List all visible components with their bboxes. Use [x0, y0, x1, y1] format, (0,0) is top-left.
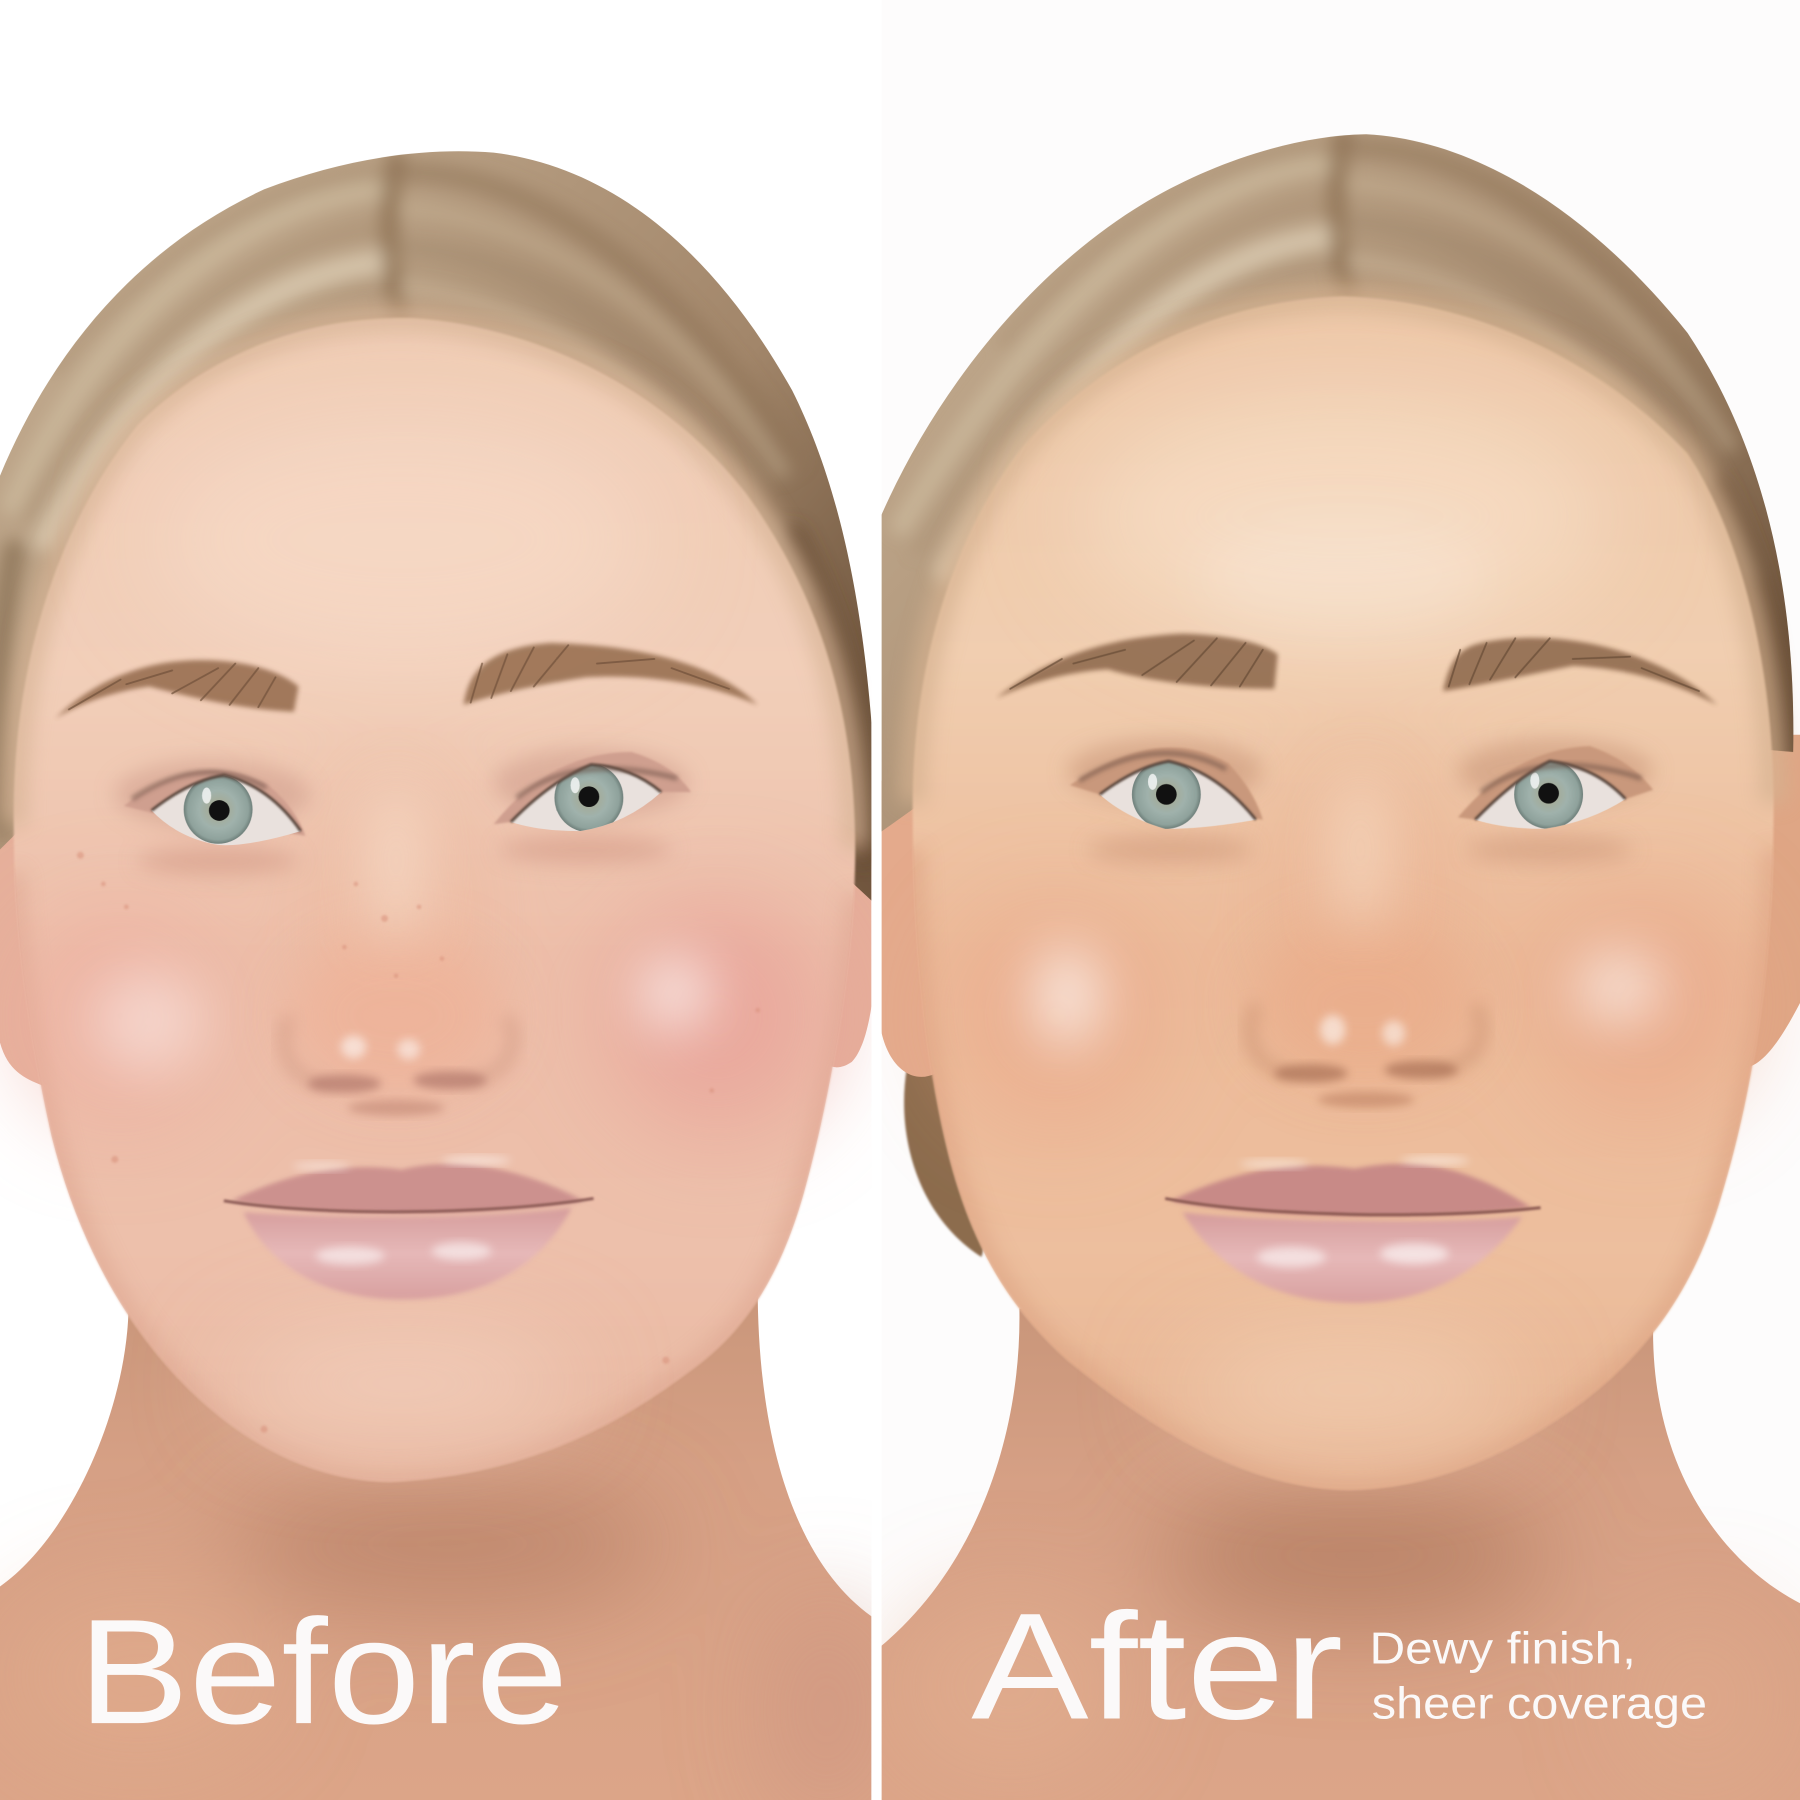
soft hairline: after: [913, 296, 1774, 804]
jaw contour: after: [913, 849, 1774, 1490]
background: after: [882, 0, 1800, 1800]
ears: after: [872, 735, 1800, 1077]
ears: before: [0, 834, 872, 1085]
eye left: after: [1070, 748, 1263, 829]
cheek highlights: after: [1035, 517, 1662, 1047]
face: before: [14, 318, 855, 1482]
neck: after: [872, 1309, 1800, 1800]
neck: before: [0, 1286, 878, 1800]
eye sockets: after: [1068, 739, 1653, 863]
neck shading: after: [895, 1481, 1779, 1791]
caption: dewy finish, sheer coverage: Dewy finish,: [1370, 1623, 1636, 1673]
face: after: [913, 296, 1774, 1490]
eye right: before: [494, 752, 691, 832]
lips: after: [1165, 1156, 1541, 1303]
hair strands: before: [0, 161, 863, 849]
lips: before: [224, 1156, 593, 1299]
panel: after: [867, 0, 1800, 1800]
freckles: before: [77, 852, 760, 1433]
eyebrows: after: [996, 634, 1717, 705]
nose: before: [284, 781, 513, 1116]
hair: after: [867, 134, 1793, 838]
eye left: before: [124, 770, 305, 845]
neck shading: before: [245, 1464, 872, 1800]
caption: dewy finish, sheer coverage: [1370, 1623, 1707, 1728]
hair: before: [0, 151, 878, 907]
panel: before: [0, 151, 884, 1800]
eye sockets: before: [115, 748, 689, 875]
label: after: After: [971, 1582, 1343, 1751]
hair bun: after: [904, 1056, 1010, 1257]
eyebrows: before: [55, 643, 758, 719]
cheek highlights: before: [92, 959, 709, 1073]
caption: dewy finish, sheer coverage: sheer coverage: [1372, 1678, 1707, 1728]
label: before: Before: [78, 1588, 568, 1755]
nose: after: [1250, 769, 1481, 1108]
face shading: before: [23, 413, 827, 1435]
hair strands: after: [901, 135, 1787, 778]
soft hairline: before: [14, 318, 855, 849]
jaw contour: before: [14, 872, 855, 1482]
eye right: after: [1458, 746, 1653, 829]
face shading: after: [953, 390, 1745, 1441]
